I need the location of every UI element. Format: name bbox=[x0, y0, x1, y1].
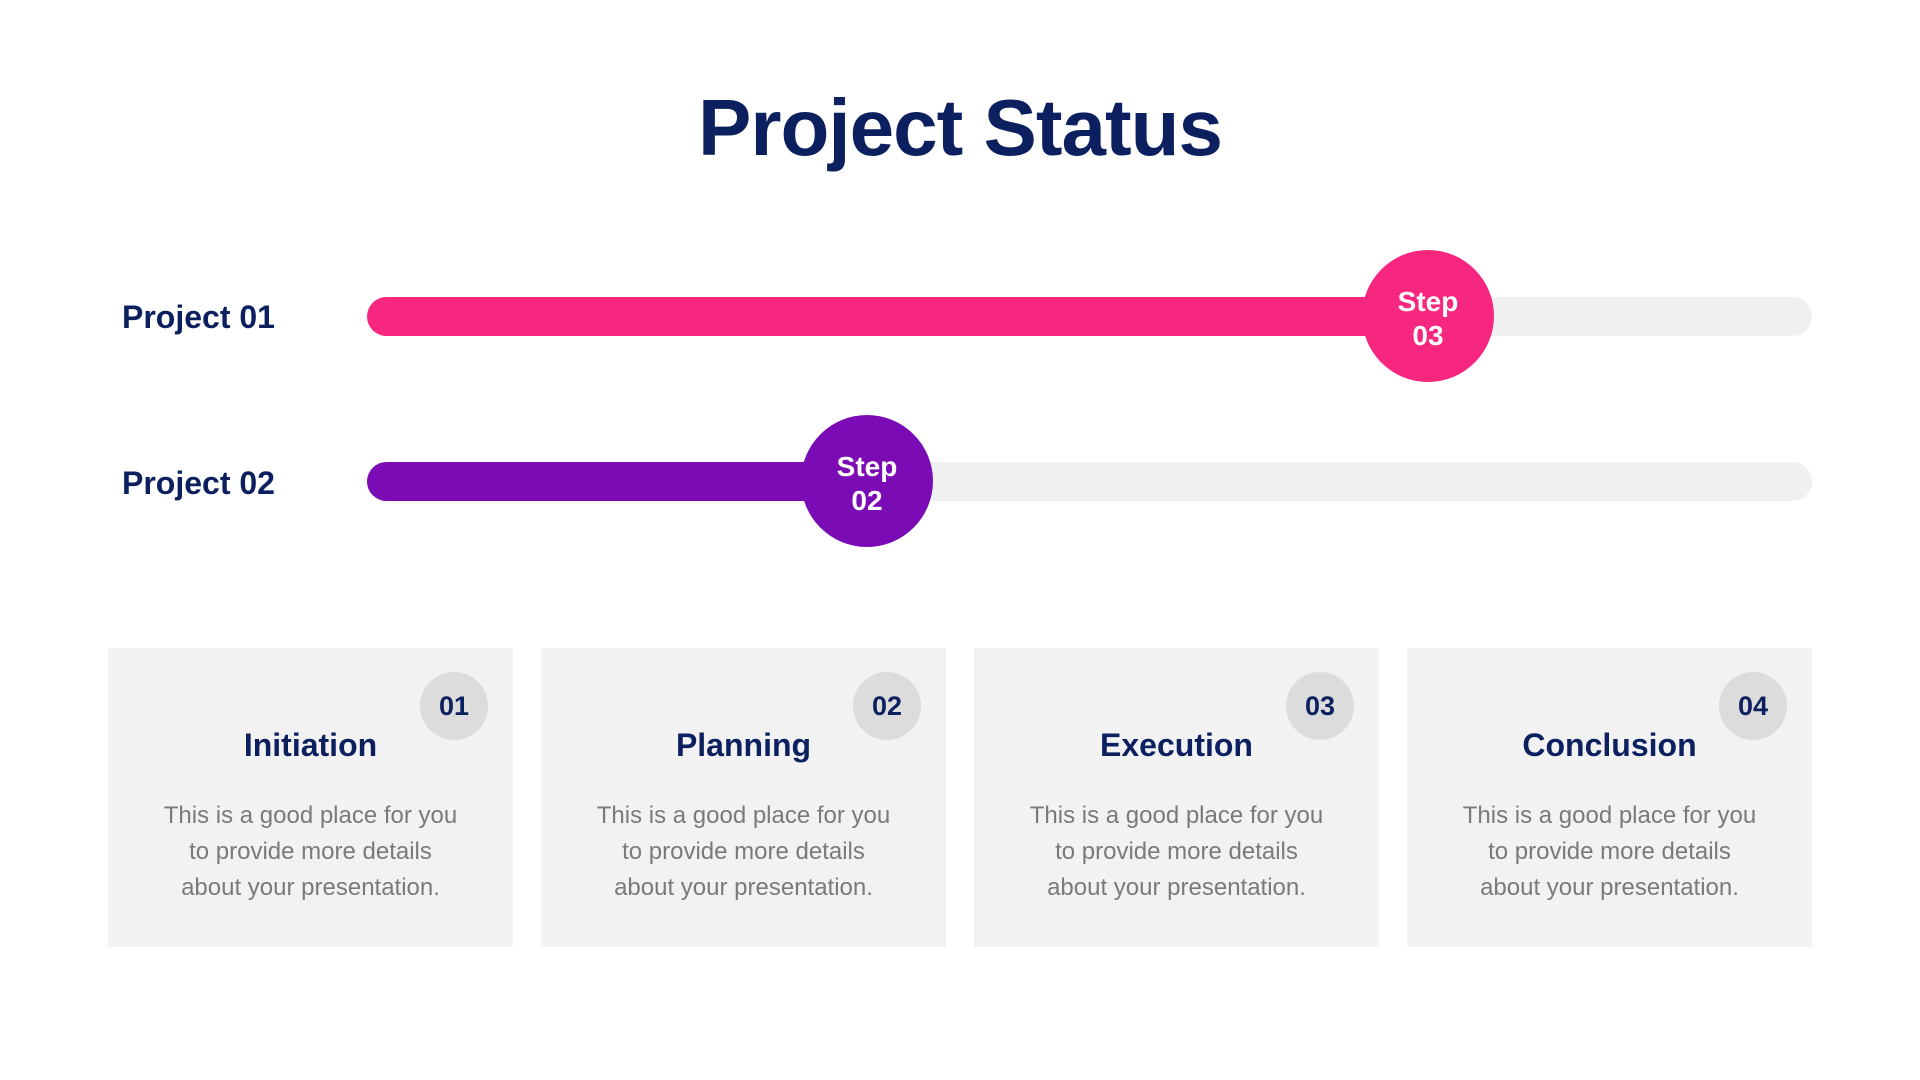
marker: step 02: Step bbox=[837, 451, 897, 482]
heading: Initiation bbox=[244, 727, 377, 763]
body text bbox=[1463, 802, 1756, 901]
marker: step 03: 03 bbox=[1412, 320, 1444, 351]
card: planning bbox=[541, 648, 946, 947]
badge 03: 03 bbox=[1305, 690, 1335, 720]
body text: about your presentation. bbox=[1480, 874, 1739, 901]
badge 02: 02 bbox=[872, 690, 902, 720]
heading: Execution bbox=[1100, 727, 1253, 763]
body text: to provide more details bbox=[189, 838, 432, 865]
badge 03 bbox=[1286, 672, 1354, 740]
body text: to provide more details bbox=[1488, 838, 1731, 865]
body text bbox=[164, 802, 457, 901]
body text: This is a good place for you bbox=[1030, 802, 1323, 829]
card: initiation bbox=[108, 648, 513, 947]
body text: about your presentation. bbox=[614, 874, 873, 901]
body text: This is a good place for you bbox=[164, 802, 457, 829]
body text: to provide more details bbox=[1055, 838, 1298, 865]
card: conclusion bbox=[1407, 648, 1812, 947]
body text bbox=[1030, 802, 1323, 901]
body text: This is a good place for you bbox=[597, 802, 890, 829]
badge 01: 01 bbox=[439, 690, 469, 720]
badge 04 bbox=[1719, 672, 1787, 740]
badge 02 bbox=[853, 672, 921, 740]
marker: step 02: 02 bbox=[851, 485, 883, 516]
heading: Planning bbox=[676, 727, 811, 763]
marker: step 03: Step bbox=[1398, 286, 1458, 317]
progress bar: project 02 bbox=[367, 462, 1812, 501]
body text: about your presentation. bbox=[181, 874, 440, 901]
title: Project Status bbox=[698, 83, 1222, 172]
fill: project 01 bbox=[367, 297, 1437, 336]
marker: step 02 bbox=[801, 415, 933, 547]
fill: project 02 bbox=[367, 462, 877, 501]
body text: to provide more details bbox=[622, 838, 865, 865]
body text: This is a good place for you bbox=[1463, 802, 1756, 829]
heading: Conclusion bbox=[1522, 727, 1697, 763]
progress bar: project 01 bbox=[367, 297, 1812, 336]
body text: about your presentation. bbox=[1047, 874, 1306, 901]
card: execution bbox=[974, 648, 1379, 947]
body text bbox=[597, 802, 890, 901]
marker: step 03 bbox=[1362, 250, 1494, 382]
badge 01 bbox=[420, 672, 488, 740]
label: project 02: Project 02 bbox=[122, 465, 275, 501]
label: project 01: Project 01 bbox=[122, 299, 275, 335]
badge 04: 04 bbox=[1738, 690, 1768, 720]
